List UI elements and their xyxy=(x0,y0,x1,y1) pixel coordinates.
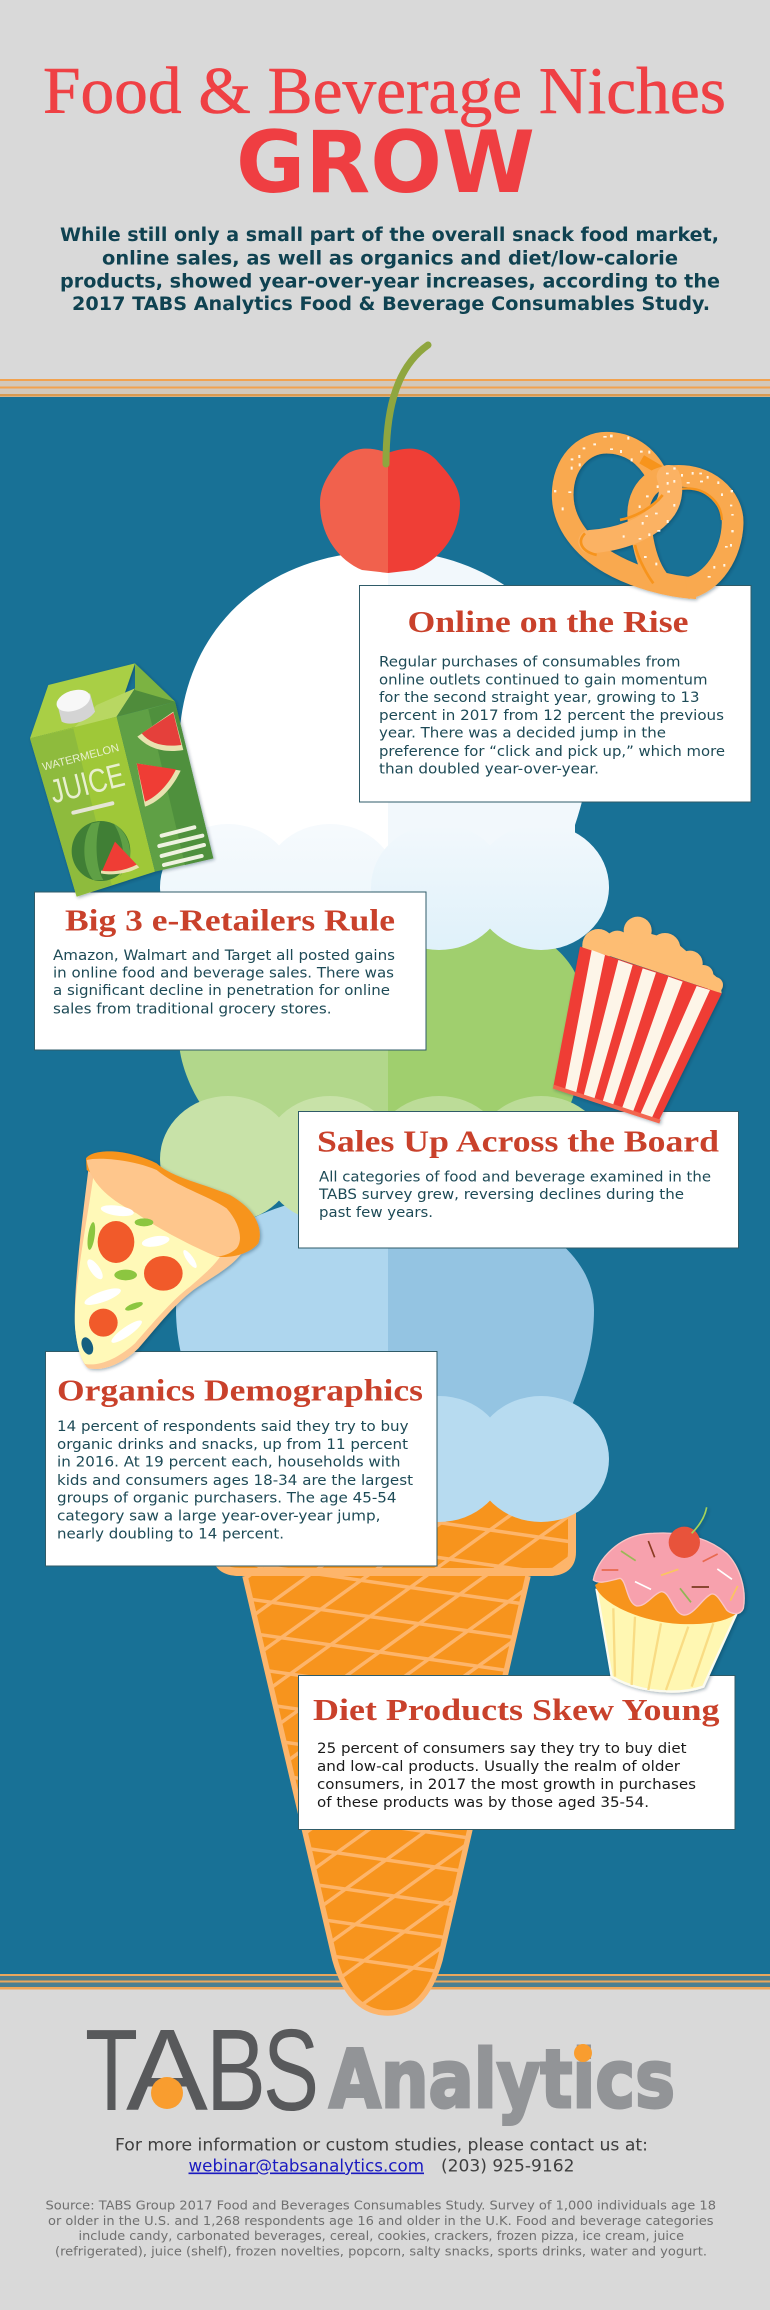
panel: big 3 e-retailers rule: in online food and beverage sales. There was xyxy=(53,966,394,982)
icon: popcorn box xyxy=(553,917,723,1122)
panel: online on the rise: preference for “click and pick up,” which more xyxy=(379,744,725,760)
panel: big 3 e-retailers rule xyxy=(34,892,426,1050)
panel: online on the rise: online outlets continued to gain momentum xyxy=(379,672,708,688)
panel: sales up across the board: Sales Up Across the Board xyxy=(317,1124,719,1158)
source note: Source: TABS Group 2017 Food and Beverages Consumables Study. Survey of 1,000 individuals age 18 xyxy=(46,2198,716,2214)
panel: diet products skew young: of these products was by those aged 35-54. xyxy=(317,1795,649,1811)
panel: online on the rise: for the second straight year, growing to 13 xyxy=(379,690,700,706)
contact text: webinar@tabsanalytics.com xyxy=(188,2156,424,2176)
logo: TABS Analytics xyxy=(85,2005,675,2135)
panel: organics demographics: category saw a large year-over-year jump, xyxy=(57,1508,380,1524)
panel: diet products skew young: consumers, in 2017 the most growth in purchases xyxy=(317,1777,696,1793)
source note: include candy, carbonated beverages, cereal, cookies, crackers, frozen pizza, ice cream, juice xyxy=(78,2229,684,2244)
icon: pretzel xyxy=(554,435,734,588)
logo: TABS Analytics: S xyxy=(263,2005,319,2135)
blue scoop xyxy=(160,1190,609,1522)
panel: big 3 e-retailers rule: Amazon, Walmart and Target all posted gains xyxy=(53,948,395,964)
panel: online on the rise: percent in 2017 from 12 percent the previous xyxy=(379,708,724,724)
panel: organics demographics: in 2016. At 19 percent each, households with xyxy=(57,1454,400,1470)
source note: or older in the U.S. and 1,268 respondents age 16 and older in the U.K. Food and beverage categories xyxy=(48,2214,714,2229)
contact text xyxy=(115,2136,648,2176)
panel: diet products skew young: and low-cal products. Usually the realm of older xyxy=(317,1759,680,1775)
icon: cherry xyxy=(320,345,460,573)
panel: organics demographics: organic drinks and snacks, up from 11 percent xyxy=(57,1437,408,1453)
panel: online on the rise: than doubled year-over-year. xyxy=(379,762,599,778)
icon: pizza slice xyxy=(75,1151,260,1369)
panel: organics demographics: kids and consumers ages 18-34 are the largest xyxy=(57,1473,413,1489)
intro text xyxy=(60,225,720,315)
panel: diet products skew young: 25 percent of consumers say they try to buy diet xyxy=(317,1741,687,1757)
panel: sales up across the board xyxy=(298,1112,738,1248)
panel: online on the rise: Regular purchases of consumables from xyxy=(379,654,680,670)
logo: TABS Analytics: A xyxy=(126,2005,209,2135)
icon: juice carton xyxy=(30,663,213,897)
panel: organics demographics: Organics Demographics xyxy=(57,1372,423,1408)
source note xyxy=(46,2198,716,2260)
panel: big 3 e-retailers rule: sales from traditional grocery stores. xyxy=(53,1002,332,1018)
icon: cupcake xyxy=(593,1507,744,1692)
label: WATERMELON JUICE: JUICE xyxy=(46,757,128,811)
intro text: While still only a small part of the overall snack food market, xyxy=(60,225,719,246)
panel: online on the rise: year. There was a decided jump in the xyxy=(379,726,666,742)
intro text: online sales, as well as organics and diet/low-calorie xyxy=(102,248,678,270)
logo: TABS Analytics: T xyxy=(85,2005,138,2135)
teal background panel xyxy=(0,396,770,1989)
contact text: For more information or custom studies, please contact us at: xyxy=(115,2136,648,2154)
title: GROW xyxy=(236,113,535,213)
panel: sales up across the board: All categories of food and beverage examined in the xyxy=(319,1170,711,1186)
panel: sales up across the board: TABS survey grew, reversing declines during the xyxy=(318,1187,684,1203)
contact text: (203) 925-9162 xyxy=(441,2156,574,2176)
green scoop xyxy=(160,900,609,1222)
panel: organics demographics xyxy=(46,1352,437,1566)
label: WATERMELON JUICE: WATERMELON xyxy=(41,742,121,774)
source note: (refrigerated), juice (shelf), frozen novelties, popcorn, salty snacks, sports drinks, water and yogurt. xyxy=(55,2244,707,2260)
label: WATERMELON JUICE xyxy=(41,742,128,811)
panel: organics demographics: nearly doubling to 14 percent. xyxy=(57,1526,284,1542)
title: Food & Beverage Niches xyxy=(43,54,726,128)
panel: big 3 e-retailers rule: a significant decline in penetration for online xyxy=(53,983,390,999)
ice cream cone xyxy=(216,1500,576,2016)
panel: diet products skew young: Diet Products Skew Young xyxy=(313,1692,720,1727)
panel: organics demographics: 14 percent of respondents said they try to buy xyxy=(57,1419,409,1435)
panel: organics demographics: groups of organic purchasers. The age 45-54 xyxy=(57,1490,396,1506)
panel: sales up across the board: past few years. xyxy=(319,1205,433,1221)
intro text: 2017 TABS Analytics Food & Beverage Consumables Study. xyxy=(72,294,710,315)
logo: TABS Analytics: B xyxy=(206,2005,266,2135)
white scoop xyxy=(160,551,609,950)
title xyxy=(43,54,726,213)
panel: online on the rise xyxy=(360,586,751,802)
intro text: products, showed year-over-year increases, according to the xyxy=(60,272,720,292)
panel: diet products skew young xyxy=(298,1676,735,1830)
panel: big 3 e-retailers rule: Big 3 e-Retailers Rule xyxy=(65,902,395,938)
panel: online on the rise: Online on the Rise xyxy=(408,604,688,639)
logo: TABS Analytics: Analytics xyxy=(329,2033,675,2126)
